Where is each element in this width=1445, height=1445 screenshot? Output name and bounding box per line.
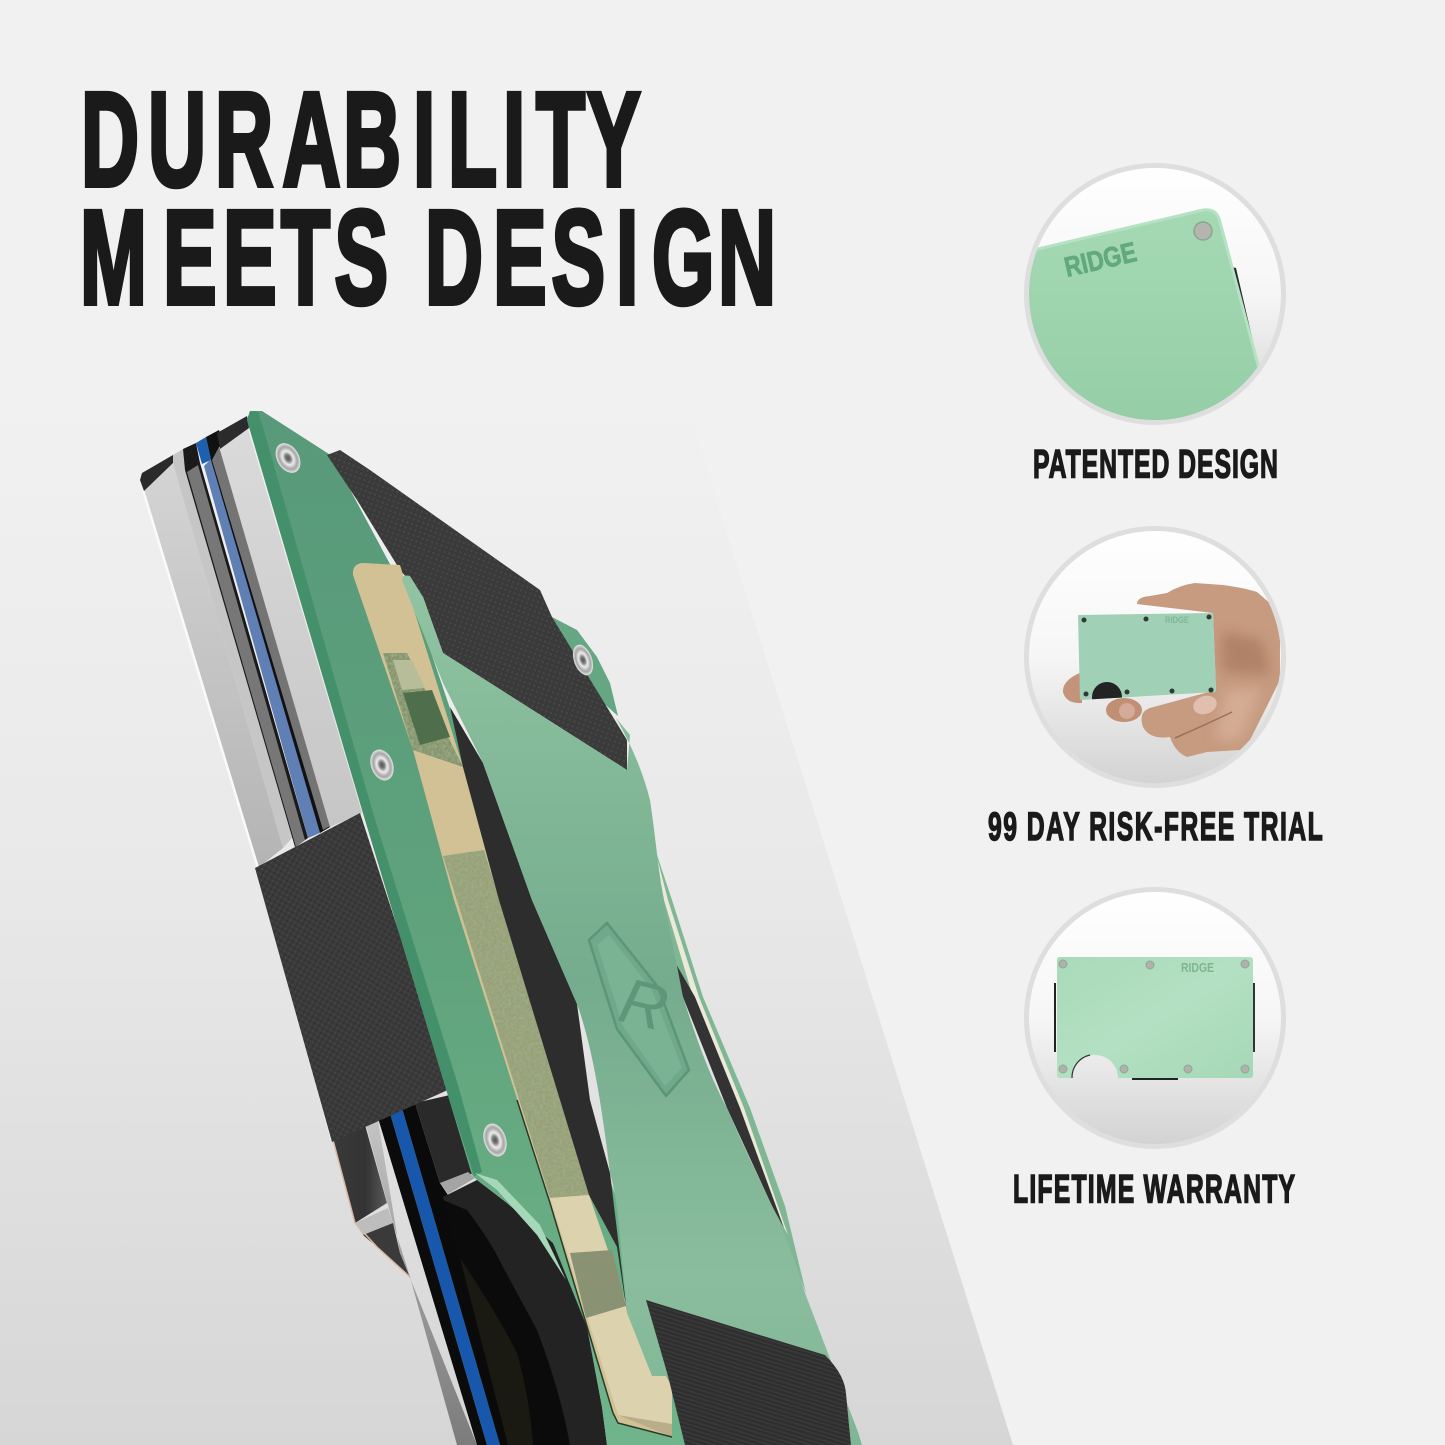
- circle badge: [1026, 528, 1284, 786]
- label: 99 DAY RISK-FREE TRIAL: [988, 805, 1323, 850]
- feature: 99 day trial: [988, 528, 1323, 850]
- banknote: [353, 563, 672, 1437]
- card stack: lower plates: [333, 1095, 530, 1445]
- hand holding wallet: [1063, 583, 1280, 757]
- lower fabric strap: [646, 1300, 851, 1445]
- feature: lifetime warranty: [1013, 890, 1295, 1212]
- diagonal grey background band: [0, 400, 1013, 1445]
- circle badge: [1026, 890, 1284, 1146]
- Ridge emblem: R: [613, 964, 675, 1045]
- title: DURABILITY: [81, 65, 641, 215]
- front money clip: [402, 576, 862, 1445]
- wallet illustration: [140, 411, 862, 1445]
- black card-notch ring: [443, 1180, 607, 1445]
- card stack: upper plates: [140, 416, 362, 1140]
- feature: patented design: [1024, 163, 1286, 479]
- outer money-clip plate: [247, 411, 700, 1445]
- circle badge: [1026, 166, 1284, 422]
- title: MEETS DESIGN: [80, 183, 776, 333]
- wallet front view: RIDGE: [1181, 960, 1214, 975]
- label: PATENTED DESIGN: [1033, 443, 1278, 487]
- wallet front view: [1054, 957, 1255, 1080]
- wallet corner image: RIDGE: [1061, 236, 1139, 283]
- rear edge: black elastic and cream line: [650, 830, 806, 1293]
- left elastic band: [255, 813, 450, 1142]
- screws: [270, 439, 597, 1160]
- black elastic behind clip: [450, 707, 627, 1313]
- hand holding wallet: RIDGE: [1165, 615, 1189, 625]
- title: [80, 65, 776, 333]
- wallet corner image: [1029, 208, 1260, 420]
- upper fabric strap: [327, 450, 627, 770]
- Ridge emblem: [589, 923, 689, 1096]
- label: LIFETIME WARRANTY: [1013, 1168, 1295, 1212]
